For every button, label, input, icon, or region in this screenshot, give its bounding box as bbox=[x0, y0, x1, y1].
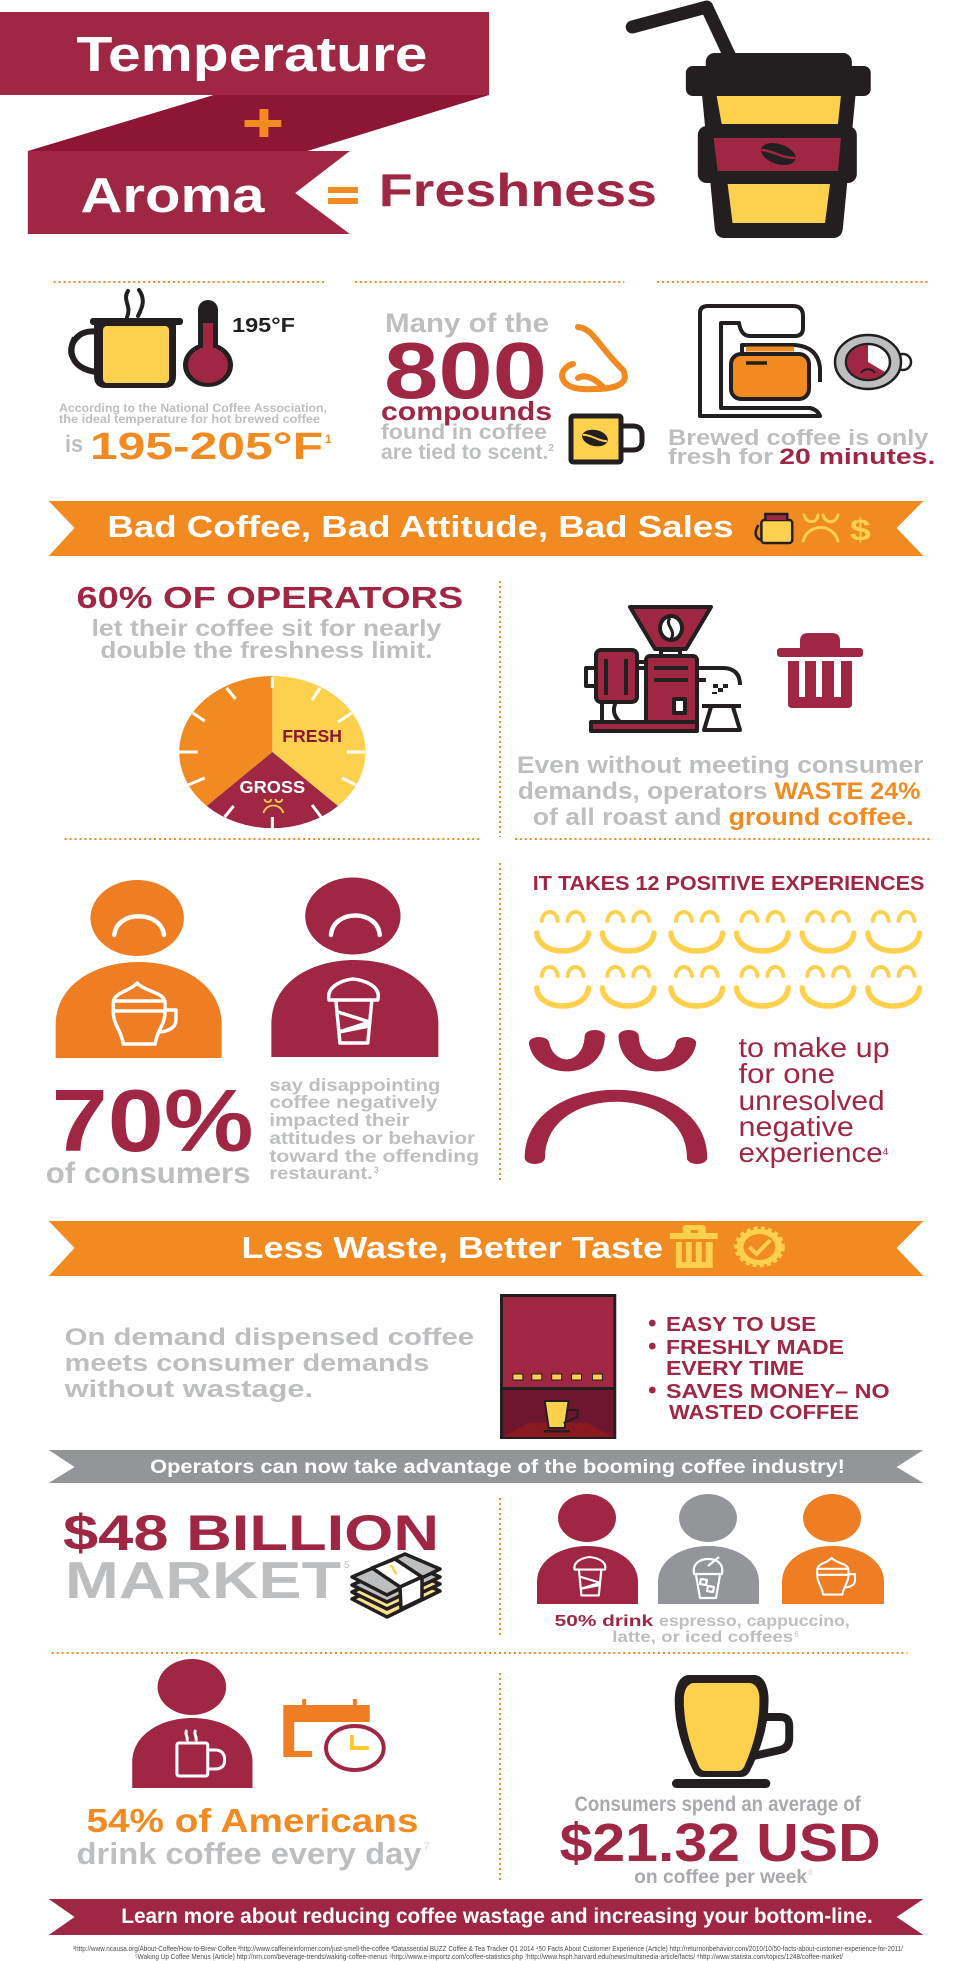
stat: 195-205°F: is bbox=[65, 431, 83, 458]
panel: ideal temperature bbox=[59, 290, 332, 468]
icon: big mug bbox=[672, 1675, 789, 1788]
list: benefits: • bbox=[648, 1310, 656, 1337]
list: benefits: EVERY TIME bbox=[666, 1358, 804, 1380]
heading: Temperature: Temperature bbox=[77, 28, 427, 82]
text: to make up for one unresolved negative experience: unresolved bbox=[739, 1085, 885, 1116]
icon: takeaway coffee cup bbox=[632, 7, 871, 238]
icon: thermometer bbox=[183, 300, 233, 387]
heading: 60% of operators: 60% OF OPERATORS bbox=[77, 580, 463, 615]
panel: on demand coffee bbox=[63, 1294, 890, 1439]
icon: orange person with latte bbox=[56, 880, 222, 1058]
footnote mark: 7 bbox=[423, 1841, 430, 1853]
stat: $48 billion: $48 BILLION bbox=[63, 1505, 439, 1561]
text: Many of the: Many of the bbox=[385, 308, 549, 338]
text: found in coffee bbox=[381, 421, 554, 464]
stat: 195-205°F: 195-205°F bbox=[90, 426, 323, 468]
panel: brewed coffee freshness bbox=[668, 306, 935, 469]
stat: 195-205°F bbox=[65, 426, 332, 468]
text: waste 24%: Even without meeting consumer bbox=[517, 752, 923, 779]
list: benefits: WASTED COFFEE bbox=[669, 1402, 859, 1424]
icon: sad clock bbox=[835, 335, 911, 389]
divider dots bbox=[52, 1653, 908, 1880]
icon: small mug with bean bbox=[571, 416, 642, 462]
label: 195°F: 195°F bbox=[232, 315, 295, 337]
panel: 50% drink espresso bbox=[537, 1494, 884, 1646]
ribbon fold bbox=[28, 95, 489, 152]
heading: Freshness: Freshness bbox=[379, 164, 657, 216]
icon: coffee grinder bbox=[586, 607, 741, 731]
banner: Less Waste, Better Taste bbox=[49, 1221, 923, 1276]
icon: mug bbox=[756, 514, 792, 543]
heading: it takes 12 positive experiences: IT TAKES 12 POSITIVE EXPERIENCES bbox=[533, 873, 924, 895]
icon: coffee machine bbox=[700, 306, 820, 416]
text: on coffee per week: on coffee per week bbox=[634, 1867, 808, 1888]
icon: clock bbox=[326, 1726, 384, 1770]
icon grid: twelve smileys bbox=[537, 912, 919, 1006]
icon: red person with frappe bbox=[271, 878, 438, 1057]
text: to make up for one unresolved negative experience: for one bbox=[739, 1058, 835, 1089]
icon: yellow trash can bbox=[670, 1225, 718, 1268]
panel: 60% of operators bbox=[77, 580, 463, 828]
text: drink coffee every day: drink coffee every day bbox=[77, 1836, 422, 1871]
stat: $21.32 USD: $21.32 USD bbox=[560, 1813, 881, 1873]
text: waste 24%: ground coffee. bbox=[729, 804, 913, 831]
text: fresh for 20 minutes: 20 minutes. bbox=[779, 444, 935, 469]
stat: 54% of Americans: 54% of Americans bbox=[86, 1802, 418, 1839]
list: benefits: • bbox=[648, 1377, 656, 1404]
text: disappointing coffee: restaurant. bbox=[269, 1163, 373, 1183]
text: 50% drink: 50% drink bbox=[555, 1613, 653, 1630]
panel: 54% of Americans bbox=[77, 1659, 430, 1871]
stat: 70%: 70% bbox=[52, 1072, 253, 1170]
text: consumers spend an average of: Consumers spend an average of bbox=[575, 1793, 862, 1816]
text: to make up for one unresolved negative experience: experience bbox=[739, 1137, 883, 1168]
list: benefits bbox=[648, 1310, 890, 1424]
text: of consumers: of consumers bbox=[46, 1157, 250, 1190]
text: disappointing coffee: coffee negatively bbox=[269, 1092, 437, 1112]
list: benefits: EASY TO USE bbox=[666, 1314, 816, 1336]
text: on demand dispensed coffee: meets consumer demands bbox=[65, 1350, 429, 1377]
panel: 12 positive experiences bbox=[533, 873, 924, 1168]
ribbon: Aroma bbox=[28, 151, 350, 234]
chart: freshness clock pie: GROSS bbox=[240, 777, 305, 797]
divider dots bbox=[499, 1498, 501, 1637]
icon: red person with frappe bbox=[537, 1494, 638, 1604]
list: benefits: • bbox=[648, 1333, 656, 1360]
banner: learn more bbox=[49, 1899, 923, 1935]
icon: big sad face bbox=[535, 1036, 697, 1158]
stat: 800: 800 bbox=[384, 326, 547, 415]
icon: calendar bbox=[283, 1699, 370, 1757]
chart: freshness clock pie bbox=[179, 676, 366, 828]
text: fresh for 20 minutes: fresh for bbox=[668, 444, 774, 469]
ribbon: Temperature bbox=[0, 12, 489, 95]
equals sign bbox=[328, 187, 358, 204]
text: National Coffee Association bbox=[59, 403, 327, 426]
text: waste 24%: demands, operators bbox=[518, 778, 767, 805]
text: to make up for one unresolved negative experience: negative bbox=[739, 1111, 854, 1142]
text: on demand dispensed coffee: without wastage. bbox=[63, 1376, 313, 1403]
text: to make up for one unresolved negative experience: 4 bbox=[883, 1147, 889, 1158]
text: fresh for 20 minutes: Brewed coffee is only bbox=[668, 425, 929, 450]
text: freshness limit: let their coffee sit for nearly bbox=[91, 615, 442, 641]
footnote mark: 5 bbox=[344, 1560, 350, 1571]
text: waste 24%: of all roast and bbox=[533, 804, 722, 831]
text: compounds: compounds bbox=[381, 396, 552, 426]
icon: gray person with iced coffee bbox=[658, 1494, 759, 1604]
icon: person with steaming mug bbox=[132, 1659, 252, 1788]
divider dots bbox=[65, 581, 932, 839]
text: found in coffee: 2 bbox=[548, 443, 554, 454]
panel: 70% of consumers bbox=[46, 878, 479, 1190]
icon: nose bbox=[562, 327, 625, 389]
text: disappointing coffee: impacted their bbox=[269, 1110, 410, 1130]
icon: orange person with latte bbox=[782, 1494, 884, 1604]
text: National Coffee Association: According to the National Coffee Association, bbox=[59, 403, 327, 415]
icon: steaming mug bbox=[71, 290, 183, 388]
banner heading: Bad Coffee, Bad Attitude, Bad Sales bbox=[107, 509, 734, 544]
list: benefits: FRESHLY MADE bbox=[666, 1337, 844, 1359]
heading: Aroma: Aroma bbox=[81, 169, 265, 223]
panel: $21.32 per week bbox=[560, 1675, 881, 1888]
banner: Bad Coffee, Bad Attitude, Bad Sales bbox=[49, 501, 923, 556]
footnotes: ⁵Waking Up Coffee Menus (Article) http://nrn.com/beverage-trends/waking-coffee-menus ⁶http://www.e-importz.com/coffee-statistics.php ⁷http://www.hsph.harvard.edu/news/multimedia-article/facts/ ⁸http://www.statista.com/topics/1248/coffee-market/ bbox=[135, 1952, 844, 1961]
header ribbon bbox=[0, 12, 657, 234]
icon: trash can bbox=[777, 633, 863, 708]
chart: freshness clock pie: FRESH bbox=[282, 726, 342, 746]
banner heading: Less Waste, Better Taste bbox=[242, 1230, 663, 1265]
icon: quality badge bbox=[737, 1229, 782, 1265]
icon: dollar: $ bbox=[850, 512, 871, 547]
panel: 800 compounds bbox=[381, 308, 642, 464]
panel: $48 billion market bbox=[63, 1505, 440, 1617]
stat: 195-205°F: 1 bbox=[325, 432, 332, 446]
text: freshness limit: double the freshness limit. bbox=[100, 637, 432, 663]
text: freshness limit bbox=[91, 615, 442, 663]
icon: money stack bbox=[352, 1554, 440, 1617]
banner text: Learn more about reducing coffee wastage and increasing your bottom-line. bbox=[121, 1905, 873, 1928]
text: on demand dispensed coffee bbox=[63, 1324, 474, 1403]
text: waste 24%: WASTE 24% bbox=[774, 778, 920, 805]
text: 50% drink: espresso, cappuccino, bbox=[659, 1613, 850, 1630]
text: 50% drink: latte, or iced coffees bbox=[612, 1629, 793, 1646]
text: found in coffee: are tied to scent. bbox=[381, 441, 548, 464]
text: on demand dispensed coffee: On demand dispensed coffee bbox=[65, 1324, 474, 1351]
text: to make up for one unresolved negative experience bbox=[739, 1032, 890, 1168]
banner text: Operators can now take advantage of the booming coffee industry! bbox=[150, 1457, 845, 1478]
text: market: MARKET bbox=[65, 1552, 341, 1610]
text: 50% drink bbox=[555, 1613, 850, 1646]
text: disappointing coffee: attitudes or behavior bbox=[269, 1128, 475, 1148]
text: disappointing coffee: toward the offending bbox=[269, 1146, 479, 1166]
plus sign bbox=[245, 109, 281, 137]
footnotes bbox=[73, 1944, 904, 1961]
banner: booming coffee industry bbox=[49, 1450, 923, 1483]
footnote mark: 8 bbox=[808, 1868, 813, 1877]
text: found in coffee: found in coffee bbox=[381, 421, 547, 444]
text: disappointing coffee bbox=[269, 1075, 479, 1183]
icon: coffee dispenser bbox=[500, 1294, 616, 1439]
list: benefits: SAVES MONEY– NO bbox=[666, 1381, 890, 1403]
text: fresh for 20 minutes bbox=[668, 425, 935, 469]
text: waste 24% bbox=[517, 752, 923, 831]
text: disappointing coffee: 3 bbox=[374, 1165, 379, 1175]
panel: wasted coffee bbox=[517, 607, 923, 831]
divider dots bbox=[499, 863, 501, 1180]
text: National Coffee Association: the ideal temperature for hot brewed coffee bbox=[59, 414, 320, 426]
text: disappointing coffee: say disappointing bbox=[269, 1075, 440, 1095]
text: 50% drink: 6 bbox=[794, 1630, 799, 1639]
icon: frown bbox=[803, 515, 838, 541]
text: to make up for one unresolved negative experience: to make up bbox=[739, 1032, 890, 1063]
divider dots bbox=[54, 281, 929, 283]
